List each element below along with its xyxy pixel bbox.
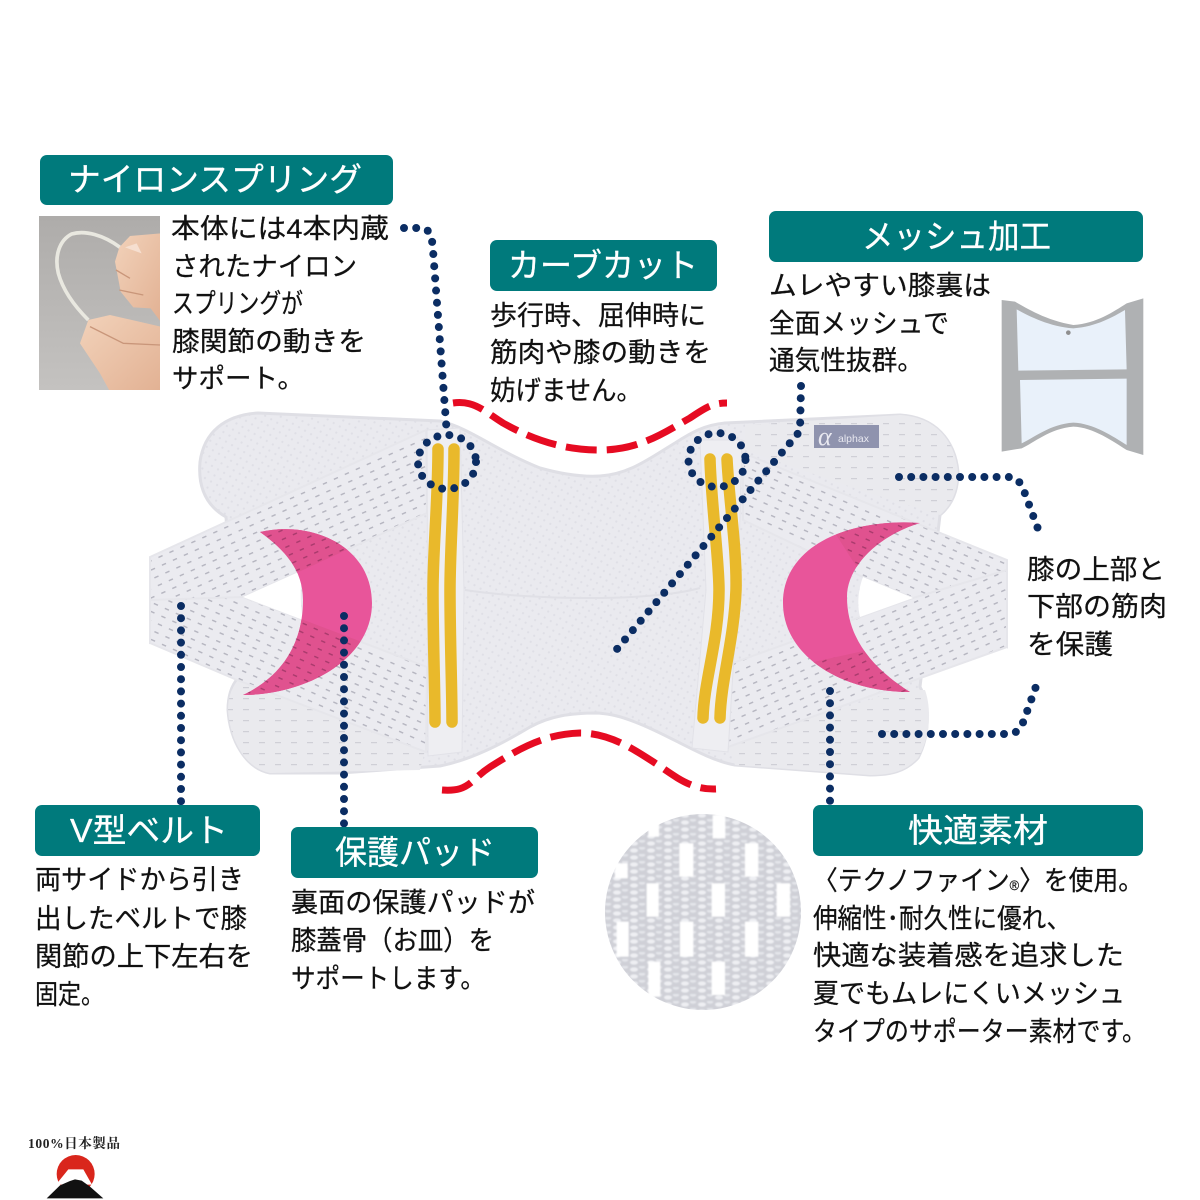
text: V belt: 固定。: [35, 980, 104, 1010]
dotted line: protective pad: [340, 616, 348, 826]
text: nylon spring: [171, 214, 389, 394]
logo: 100% made in Japan: 100%日本製品: [28, 1135, 120, 1151]
left yellow springs: [433, 449, 454, 722]
brace product illustration: [150, 413, 1007, 775]
photo: mesh back side: [1002, 298, 1143, 455]
text: nylon spring: されたナイロン: [172, 252, 357, 282]
dotted line: comfort material: [826, 691, 834, 805]
text: curve cut: 歩行時、屈伸時に: [490, 301, 706, 331]
heading: curve cut: カーブカット: [508, 247, 698, 284]
heading: mesh: メッシュ加工: [862, 218, 1051, 255]
text: comfort material: 快適な装着感を追求した: [813, 941, 1124, 971]
lower lobes mesh: [228, 680, 425, 773]
right upper strap: [743, 453, 1007, 647]
left upper strap: [150, 430, 427, 643]
heading: curve cut: [490, 240, 717, 291]
text: curve cut: 妨げません。: [490, 376, 642, 406]
heading: mesh: [769, 211, 1143, 262]
dotted line: nylon spring: [404, 228, 447, 435]
text: comfort material: 伸縮性･耐久性に優れ、: [813, 904, 1071, 934]
left opening: [243, 570, 303, 620]
text: V belt: 関節の上下左右を: [35, 942, 253, 972]
heading: protective pad: 保護パッド: [335, 834, 495, 871]
text: comfort material: [813, 866, 1146, 1047]
text: V belt: 出したベルトで膝: [35, 904, 247, 934]
text: nylon spring: 膝関節の動きを: [172, 327, 366, 357]
text: mesh: ムレやすい膝裏は: [769, 271, 991, 301]
logo: 100% made in Japan: [28, 1135, 120, 1198]
text: nylon spring: 本体には4本内蔵: [171, 214, 389, 244]
heading: comfort material: [813, 805, 1143, 856]
text: curve cut: [490, 301, 711, 406]
text: muscle protection: [1027, 555, 1167, 660]
brace body: [200, 413, 958, 775]
text: comfort material: 夏でもムレにくいメッシュ: [813, 979, 1125, 1009]
dotted line: lower muscle: [882, 678, 1039, 734]
center seam: [465, 588, 700, 598]
text: V belt: 両サイドから引き: [35, 865, 244, 895]
red dashed line: bottom curve cut: [442, 733, 716, 790]
brand tag: alphax: α: [818, 422, 833, 451]
text: nylon spring: サポート。: [172, 364, 304, 394]
right yellow springs: [703, 459, 736, 718]
text: comfort material: 〈テクノファイン®〉を使用。: [813, 866, 1143, 896]
heading: nylon spring: [40, 155, 393, 205]
text: protective pad: 膝蓋骨（お皿）を: [291, 926, 494, 956]
text: muscle protection: を保護: [1027, 630, 1113, 660]
photo: fabric close-up: [605, 814, 801, 1010]
right protective pad: [783, 522, 920, 692]
dotted circle: left spring tops: [418, 435, 476, 489]
text: muscle protection: 膝の上部と: [1027, 555, 1165, 585]
left lower strap: [150, 597, 427, 752]
left protective pad: [243, 529, 372, 695]
heading: comfort material: 快適素材: [908, 812, 1048, 849]
dotted line: upper muscle: [899, 477, 1041, 537]
text: nylon spring: スプリングが: [172, 289, 303, 319]
text: curve cut: 筋肉や膝の動きを: [490, 338, 711, 368]
dotted line: mesh: [612, 386, 801, 655]
text: protective pad: [291, 888, 535, 994]
brand tag: alphax: [814, 422, 879, 451]
text: protective pad: 裏面の保護パッドが: [291, 888, 535, 918]
text: mesh: 通気性抜群。: [769, 346, 923, 376]
dotted line: V belt: [177, 606, 185, 803]
text: mesh: [769, 271, 991, 376]
dotted circle: right spring tops: [688, 433, 746, 487]
text: mesh: 全面メッシュで: [769, 309, 949, 339]
brand tag: alphax: alphax: [838, 433, 870, 445]
right opening: [858, 577, 913, 617]
photo: nylon spring held in hands: [39, 216, 161, 392]
heading: V belt: [35, 805, 260, 856]
red dashed line: top curve cut: [453, 403, 727, 450]
heading: nylon spring: ナイロンスプリング: [68, 161, 362, 198]
heading: protective pad: [291, 827, 538, 878]
text: muscle protection: 下部の筋肉: [1027, 592, 1167, 622]
right lower strap: [728, 570, 1007, 747]
spring channels: [427, 428, 464, 756]
heading: V belt: V型ベルト: [70, 812, 228, 849]
text: protective pad: サポートします。: [291, 964, 485, 994]
text: V belt: [35, 865, 253, 1010]
text: comfort material: タイプのサポーター素材です。: [813, 1017, 1146, 1047]
